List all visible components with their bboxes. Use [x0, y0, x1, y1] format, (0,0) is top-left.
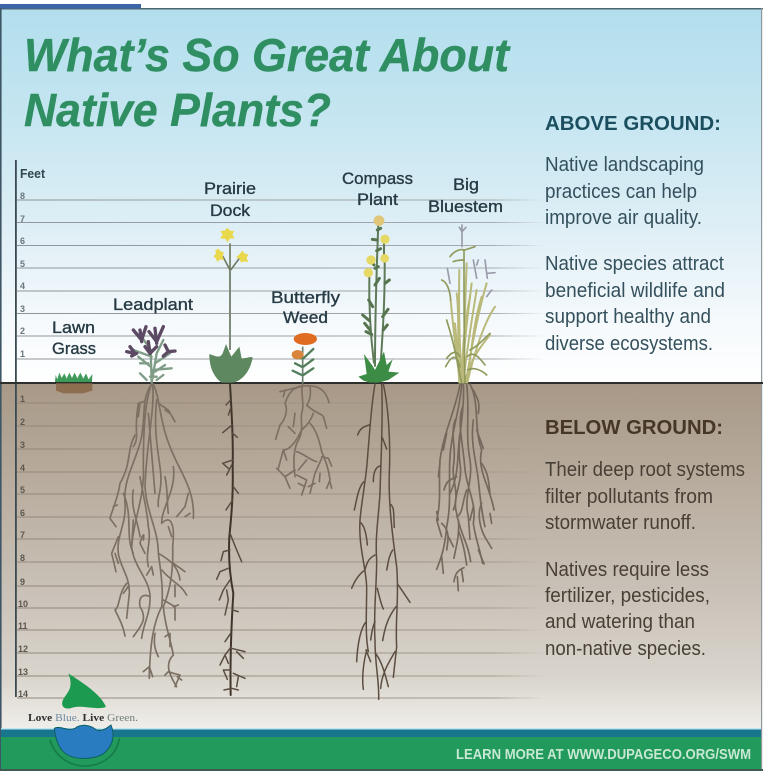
- text block: air quality: practices can help: [545, 181, 697, 203]
- background: soil: [1, 384, 762, 729]
- plant: leadplant: [127, 327, 175, 383]
- title: What’s So Great About: [24, 29, 511, 81]
- axis numbers below ground: 11: [18, 621, 28, 631]
- text block: root systems: [545, 459, 745, 534]
- axis numbers above ground: 3: [20, 304, 25, 314]
- axis numbers below ground: 2: [20, 417, 25, 427]
- title: [24, 29, 511, 136]
- axis numbers below ground: 1: [20, 394, 25, 404]
- text block: root systems: stormwater runoff.: [545, 512, 696, 534]
- roots: big bluestem: [437, 384, 494, 591]
- axis numbers below ground: 3: [20, 440, 25, 450]
- plant label: butterfly weed: Weed: [283, 308, 328, 327]
- background: sky: [1, 9, 762, 383]
- height scale axis: [15, 160, 46, 697]
- text block: less inputs: non-native species.: [545, 638, 706, 660]
- axis numbers below ground: 4: [20, 463, 25, 473]
- text block: less inputs: and watering than: [545, 611, 695, 633]
- text block: root systems: filter pollutants from: [545, 486, 713, 508]
- plant: butterfly weed: [292, 333, 317, 383]
- text block: wildlife: beneficial wildlife and: [545, 280, 725, 302]
- axis numbers below ground: [18, 394, 28, 699]
- plant label: leadplant: Leadplant: [113, 295, 193, 314]
- text block: air quality: [545, 154, 704, 229]
- axis numbers below ground: 8: [20, 553, 25, 563]
- plant: big bluestem: [442, 225, 495, 383]
- text block: air quality: Native landscaping: [545, 154, 704, 176]
- text block: wildlife: support healthy and: [545, 306, 711, 328]
- axis numbers above ground: 1: [20, 349, 25, 359]
- axis numbers above ground: 2: [20, 326, 25, 336]
- plant label: lawn grass: Lawn: [52, 318, 95, 337]
- plant label: butterfly weed: Butterfly: [271, 288, 341, 307]
- text block: wildlife: Native species attract: [545, 253, 724, 275]
- plant label: butterfly weed: [271, 288, 341, 327]
- axis numbers below ground: 6: [20, 508, 25, 518]
- axis numbers above ground: [20, 191, 25, 359]
- plant label: big bluestem: Big: [453, 175, 479, 194]
- text block: wildlife: diverse ecosystems.: [545, 333, 713, 355]
- title: Native Plants?: [24, 84, 331, 136]
- text block: less inputs: [545, 559, 710, 660]
- plant: prairie dock: [209, 228, 253, 383]
- axis numbers above ground: 4: [20, 281, 25, 291]
- axis label: feet: Feet: [20, 166, 46, 181]
- heading: below ground: BELOW GROUND:: [545, 417, 723, 439]
- axis numbers above ground: 5: [20, 259, 25, 269]
- plant label: big bluestem: Bluestem: [428, 197, 503, 216]
- text block: wildlife: [545, 253, 725, 355]
- axis numbers above ground: 6: [20, 236, 25, 246]
- axis numbers above ground: 7: [20, 214, 25, 224]
- text block: less inputs: fertilizer, pesticides,: [545, 585, 710, 607]
- axis numbers below ground: 9: [20, 577, 25, 587]
- roots: butterfly weed: [276, 384, 332, 495]
- plant label: prairie dock: Prairie: [204, 179, 256, 198]
- axis numbers below ground: 7: [20, 530, 25, 540]
- text block: less inputs: Natives require less: [545, 559, 709, 581]
- height scale grid lines: [17, 200, 545, 698]
- plant label: lawn grass: Grass: [52, 339, 96, 358]
- plant label: compass plant: Compass: [342, 169, 413, 188]
- logo: love blue live green: [28, 673, 138, 766]
- plant label: big bluestem: [428, 175, 503, 216]
- heading: above ground: ABOVE GROUND:: [545, 113, 721, 135]
- plant label: prairie dock: [204, 179, 256, 220]
- logo tagline: Love Blue. Live Green.: [28, 712, 138, 724]
- footer band: [0, 728, 763, 771]
- axis numbers below ground: 5: [20, 485, 25, 495]
- axis numbers below ground: 14: [18, 689, 28, 699]
- plant label: lawn grass: [52, 318, 96, 358]
- text block: root systems: Their deep root systems: [545, 459, 745, 481]
- roots: compass plant: [352, 384, 410, 699]
- text block: air quality: improve air quality.: [545, 207, 702, 229]
- axis numbers below ground: 10: [18, 599, 28, 609]
- ground line: [0, 382, 763, 384]
- axis numbers below ground: 12: [18, 644, 28, 654]
- logo icon: [50, 673, 119, 766]
- axis numbers above ground: 8: [20, 191, 25, 201]
- plant: compass plant: [358, 215, 399, 383]
- axis numbers below ground: 13: [18, 667, 28, 677]
- plant: lawn grass: [55, 373, 92, 393]
- roots: prairie dock: [217, 384, 245, 695]
- plant label: prairie dock: Dock: [210, 201, 251, 220]
- roots: leadplant: [110, 384, 193, 687]
- plant label: compass plant: Plant: [357, 190, 398, 209]
- plant label: compass plant: [342, 169, 413, 209]
